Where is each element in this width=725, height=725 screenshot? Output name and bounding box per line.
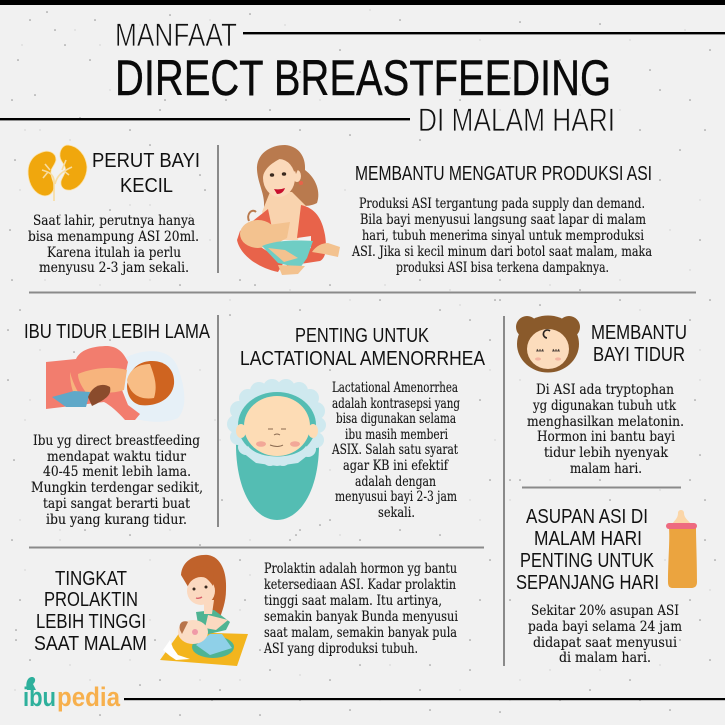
text block: 40-45 menit lebih lama. [43, 464, 191, 480]
heading [92, 149, 200, 197]
heading: PERUT BAYI [92, 149, 200, 172]
text block: tapi sangat berarti buat [43, 496, 190, 512]
heading: TINGKAT [55, 567, 127, 590]
text block [31, 433, 203, 528]
heading: LACTATIONAL AMENORRHEA [240, 347, 485, 370]
text block: semakin banyak Bunda menyusui [264, 609, 459, 625]
title: DIRECT BREASTFEEDING [115, 50, 611, 106]
horizontal divider: upper [29, 292, 696, 294]
panel: ibu tidur lebih lama [24, 320, 210, 528]
text block: di malam hari. [559, 650, 651, 666]
text block: adalah dengan [355, 474, 436, 490]
heading: SAAT MALAM [34, 632, 147, 655]
heading: MALAM HARI [534, 527, 642, 550]
text block: mendapat waktu tidur [47, 449, 186, 465]
panel: perut bayi kecil [28, 145, 200, 276]
text block: Ibu yg direct breastfeeding [33, 433, 200, 449]
icon: baby in bear hood [516, 316, 580, 372]
text block: tidur lebih nyenyak [544, 445, 669, 461]
heading [516, 505, 659, 594]
text block: ASIX. Salah satu syarat [331, 442, 458, 458]
horizontal divider: lower left [29, 546, 484, 548]
text block: Di ASI ada tryptophan [536, 382, 674, 398]
panel: asupan asi di malam hari [516, 505, 697, 666]
text block: Hormon ini bantu bayi [537, 429, 676, 445]
text block: Lactational Amenorrhea [332, 380, 458, 396]
panel: membantu mengatur produksi asi [237, 145, 652, 276]
title: DI MALAM HARI [418, 102, 615, 138]
text block: agar KB ini efektif [343, 458, 449, 474]
text block: menyusu 2-3 jam sekali. [39, 260, 189, 276]
illustration: swaddled baby [227, 379, 326, 520]
text block: didapat saat menyusui [533, 635, 678, 651]
text block: ketersediaan ASI. Kadar prolaktin [264, 577, 456, 593]
heading [240, 324, 485, 370]
text block: Karena itulah ia perlu [47, 245, 181, 261]
text block: sekali. [378, 505, 415, 521]
text block [331, 380, 460, 521]
text block [528, 603, 682, 666]
icon: stomach [28, 145, 87, 201]
logo: ibupedia [23, 677, 121, 712]
text block: yg digunakan tubuh utk [532, 398, 677, 414]
text block: Mungkin terdengar sedikit, [31, 480, 203, 496]
heading: PROLAKTIN [44, 588, 138, 611]
illustration: mother lying with baby [46, 346, 184, 422]
vertical divider: right column [503, 316, 505, 666]
heading: PENTING UNTUK [295, 324, 429, 347]
text block: menghasilkan melatonin. [527, 414, 684, 430]
text block: ASI yang diproduksi tubuh. [263, 641, 418, 657]
heading: LEBIH TINGGI [36, 610, 146, 633]
text block: ASI. Jika si kecil minum dari botol saat malam, maka [351, 244, 652, 260]
illustration: mother breastfeeding [237, 145, 340, 275]
text block [527, 382, 684, 477]
title [0, 17, 725, 138]
text block: Bila bayi menyusui langsung saat lapar di malam [360, 212, 646, 228]
heading: MEMBANTU [591, 321, 687, 344]
heading: KECIL [120, 174, 173, 197]
text block: bisa digunakan selama [336, 411, 456, 427]
heading: BAYI TIDUR [593, 343, 685, 366]
text block [28, 213, 199, 276]
title: MANFAAT [115, 17, 237, 53]
text block: ibu yang kurang tidur. [46, 512, 187, 528]
text block: pada bayi selama 24 jam [528, 619, 682, 635]
text block [351, 196, 652, 276]
panel: membantu bayi tidur [516, 316, 687, 477]
illustration: mother with baby on mat [160, 555, 248, 666]
footer line [124, 698, 725, 700]
heading [34, 567, 147, 655]
panel: tingkat prolaktin [34, 555, 459, 666]
text block: ibu masih memberi [345, 427, 449, 443]
heading [591, 321, 687, 366]
text block: tinggi saat malam. Itu artinya, [264, 593, 442, 609]
text block: Saat lahir, perutnya hanya [33, 213, 195, 229]
logo: ibupedia: ibu [23, 682, 56, 712]
icon: milk bottle [666, 510, 697, 588]
horizontal divider: right column [522, 486, 681, 488]
text block: hari, tubuh menerima sinyal untuk memproduksi [362, 228, 645, 244]
logo: ibupedia: pedia [57, 682, 121, 712]
text block: Prolaktin adalah hormon yg bantu [264, 561, 457, 577]
heading: PENTING UNTUK [520, 549, 654, 572]
text block: malam hari. [570, 461, 642, 477]
text block: saat malam, semakin banyak pula [264, 625, 457, 641]
heading: IBU TIDUR LEBIH LAMA [24, 320, 210, 343]
text block: adalah kontrasepsi yang [332, 396, 460, 412]
text block: Sekitar 20% asupan ASI [531, 603, 679, 619]
text block [263, 561, 459, 657]
text block: Produksi ASI tergantung pada supply dan demand. [359, 196, 645, 212]
top black bar [0, 0, 725, 5]
panel: lactational amenorrhea [227, 324, 485, 521]
text block: produksi ASI bisa terkena dampaknya. [396, 260, 609, 276]
vertical divider: mid left [217, 315, 219, 527]
text block: bisa menampung ASI 20ml. [28, 229, 199, 245]
heading: ASUPAN ASI DI [526, 505, 648, 528]
vertical divider: upper left [217, 145, 219, 273]
text block: menyusui bayi 2-3 jam [335, 489, 457, 505]
heading: SEPANJANG HARI [516, 571, 659, 594]
